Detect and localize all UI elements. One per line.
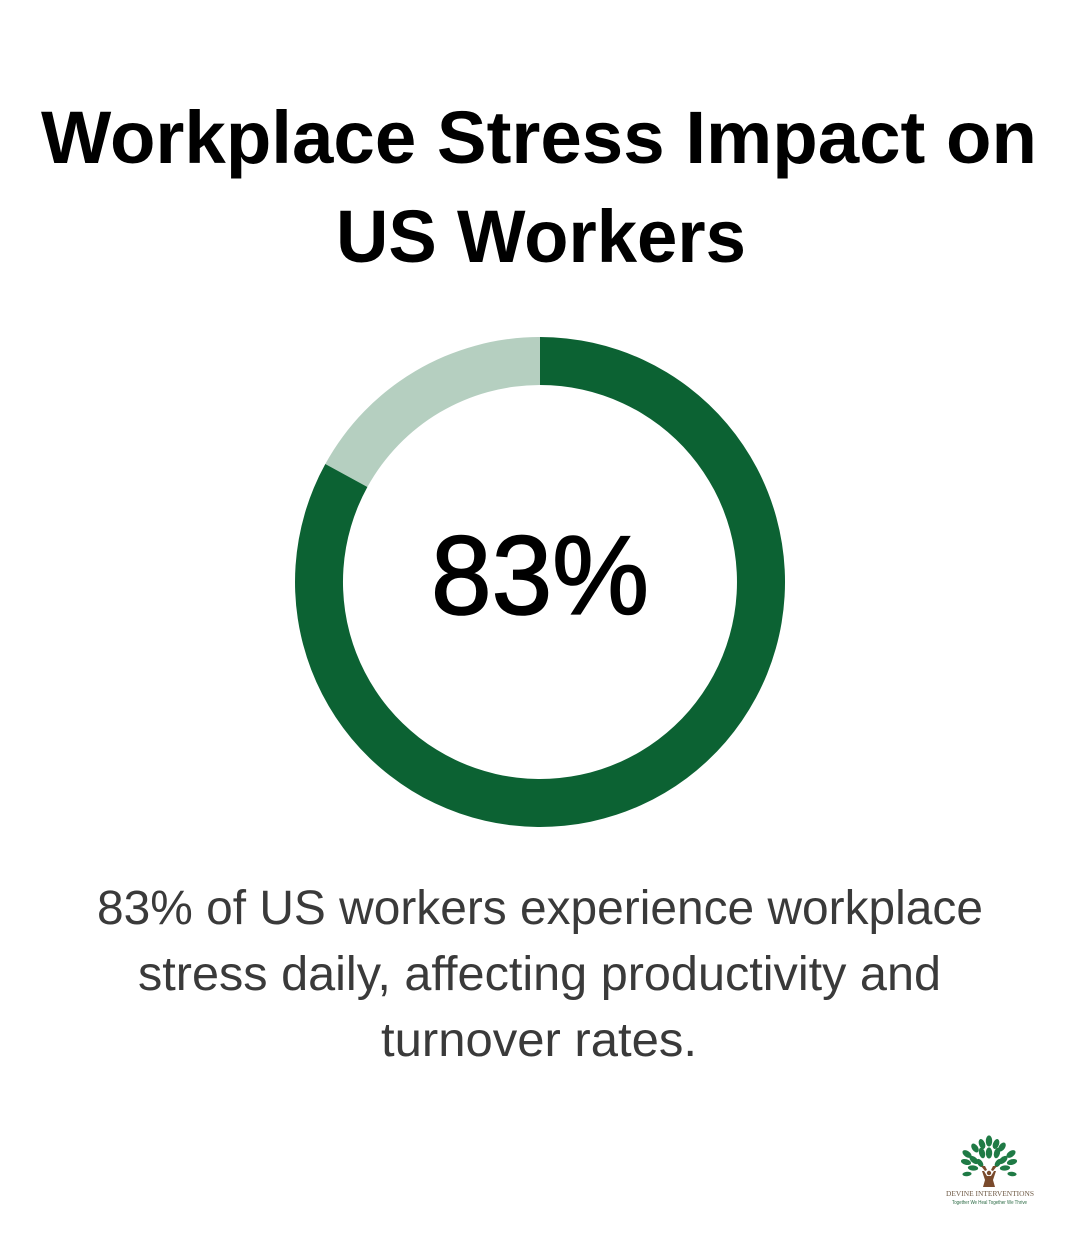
title: Workplace Stress Impact on <box>41 96 1037 179</box>
title: US Workers <box>336 195 746 278</box>
description text: turnover rates. <box>381 1014 697 1067</box>
title <box>41 96 1037 278</box>
description text <box>97 882 983 1067</box>
donut chart: 83 percent <box>295 337 785 827</box>
logo name: DEVINE INTERVENTIONS <box>946 1190 1034 1198</box>
icon: tree leaves <box>960 1135 1018 1177</box>
icon: tree trunk figure <box>981 1166 997 1187</box>
donut remainder segment: 17 percent <box>325 337 540 487</box>
donut value segment: 83 percent <box>295 337 785 827</box>
logo tagline: Together We Heal Together We Thrive <box>952 1200 1027 1206</box>
logo: Devine Interventions <box>946 1135 1034 1206</box>
donut center value: 83% <box>431 513 649 638</box>
description text: stress daily, affecting productivity and <box>138 948 941 1001</box>
description text: 83% of US workers experience workplace <box>97 882 983 935</box>
